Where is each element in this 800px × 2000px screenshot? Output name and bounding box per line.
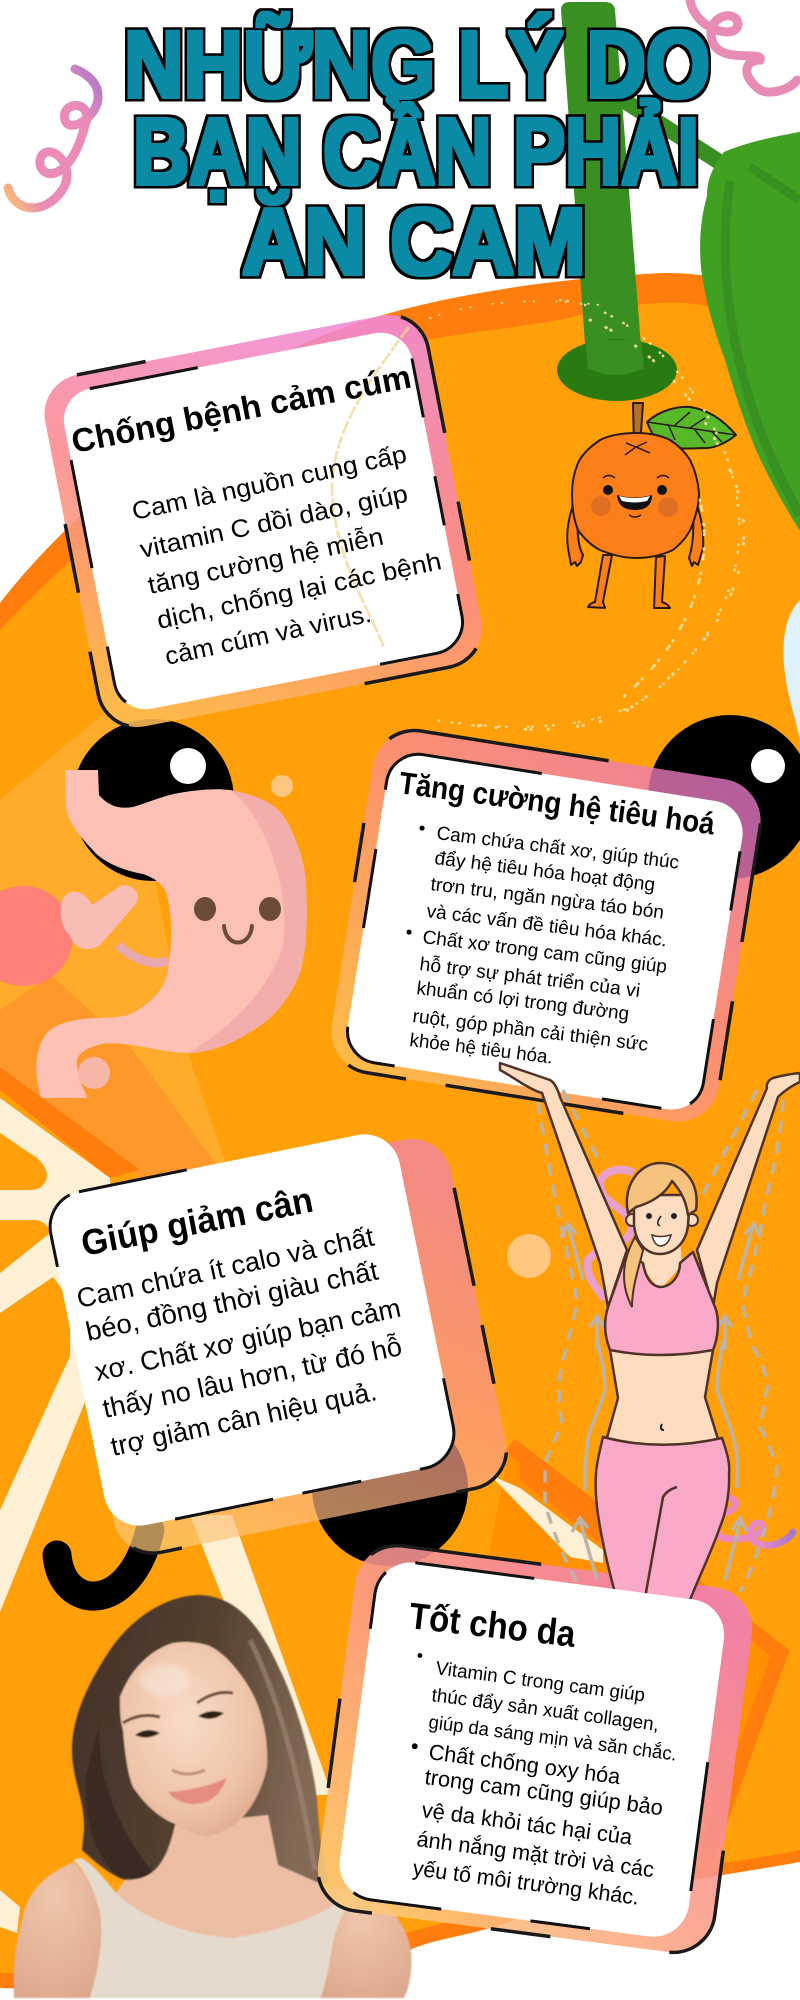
heading: Chống bệnh cảm cúm — [68, 358, 414, 460]
card: tăng cường hệ tiêu hoá — [325, 724, 767, 1128]
black circle left — [72, 719, 234, 881]
black arc — [57, 1530, 150, 1596]
confetti swirl bottom right — [717, 1497, 793, 1545]
body text: Cam chứa ít calo và chất — [74, 1221, 377, 1314]
heading: Giúp giảm cân — [78, 1179, 316, 1264]
confetti swirl top left — [8, 69, 98, 208]
body list: hỗ trợ sự phát triển của vi — [418, 953, 641, 1002]
card: giúp giảm cân — [44, 1128, 514, 1560]
orange mascot — [567, 403, 736, 608]
body list: Vitamin C trong cam giúp — [434, 1658, 646, 1706]
neck — [640, 1240, 682, 1290]
body list: Chất chống oxy hóa — [427, 1739, 623, 1789]
body list: • — [415, 1645, 424, 1666]
leaf and stem — [557, 2, 800, 531]
heading: Tăng cường hệ tiêu hoá — [397, 765, 718, 842]
title: ĂN CAM — [242, 189, 586, 295]
body text: vitamin C dồi dào, giúp — [137, 480, 410, 564]
body list: ánh nắng mặt trời và các — [415, 1826, 656, 1882]
body list: khuẩn có lợi trong đường — [415, 978, 630, 1025]
confetti swirl top right — [690, 0, 797, 92]
black circle lower — [312, 1410, 468, 1566]
heading: Tốt cho da — [407, 1595, 578, 1655]
body text: xơ. Chất xơ giúp bạn cảm — [92, 1293, 403, 1387]
body text — [74, 1221, 405, 1462]
title: NHỮNG LÝ DO — [124, 12, 710, 118]
card: chống bệnh cảm cúm — [38, 308, 489, 734]
head — [626, 1214, 638, 1226]
body list: Chất xơ trong cam cũng giúp — [421, 927, 668, 978]
body list: • — [404, 922, 414, 944]
body text: Cam là nguồn cung cấp — [129, 440, 409, 526]
black circle right — [648, 715, 800, 879]
body list: giúp da sáng mịn và săn chắc. — [427, 1711, 678, 1766]
body text: trợ giảm cân hiệu quả. — [108, 1376, 379, 1462]
body list — [409, 1645, 678, 1910]
body text: tăng cường hệ miễn — [145, 522, 386, 600]
decorative pale blue blob — [783, 600, 800, 745]
pink circle — [0, 886, 73, 986]
body list: đẩy hệ tiêu hóa hoạt động — [433, 848, 656, 896]
card frame: tốt cho da — [313, 1540, 757, 1958]
body text — [129, 440, 444, 671]
body list — [404, 818, 680, 1069]
card content: tốt cho da — [335, 1558, 729, 1941]
body list: thúc đẩy sản xuất collagen, — [430, 1685, 660, 1736]
motion lines — [538, 1090, 783, 1592]
body list: và các vấn đề tiêu hóa khác. — [425, 901, 668, 951]
glitter sparkle trail — [430, 300, 744, 729]
stomach illustration — [36, 770, 307, 1098]
body text: thấy no lâu hơn, từ đó hỗ — [100, 1330, 405, 1424]
body list: yếu tố môi trường khác. — [411, 1855, 641, 1910]
body list: trong cam cũng giúp bảo — [423, 1764, 665, 1820]
raised arms — [500, 1063, 627, 1307]
swirl behind head — [588, 1170, 633, 1300]
orange segment lines — [0, 1098, 603, 1933]
body list: ruột, góp phần cải thiện sức — [411, 1006, 649, 1056]
body list: khỏe hệ tiêu hóa. — [408, 1030, 554, 1069]
legs and midriff — [603, 1350, 722, 1452]
pink top — [605, 1252, 718, 1355]
title — [124, 12, 710, 295]
body list: vệ da khỏi tác hại của — [420, 1797, 635, 1850]
pale decorative circles — [271, 775, 551, 1278]
body text: béo, đồng thời giàu chất — [83, 1255, 381, 1347]
body list: • — [417, 818, 427, 840]
woman portrait — [14, 1595, 411, 1998]
body list: Cam chứa chất xơ, giúp thúc — [435, 823, 680, 874]
exercising woman illustration — [500, 1063, 800, 1600]
body list: • — [409, 1733, 420, 1759]
body text: dịch, chống lại các bệnh — [154, 547, 444, 635]
body text: cảm cúm và virus. — [162, 600, 374, 671]
body list: trơn tru, ngăn ngừa táo bón — [429, 874, 665, 924]
